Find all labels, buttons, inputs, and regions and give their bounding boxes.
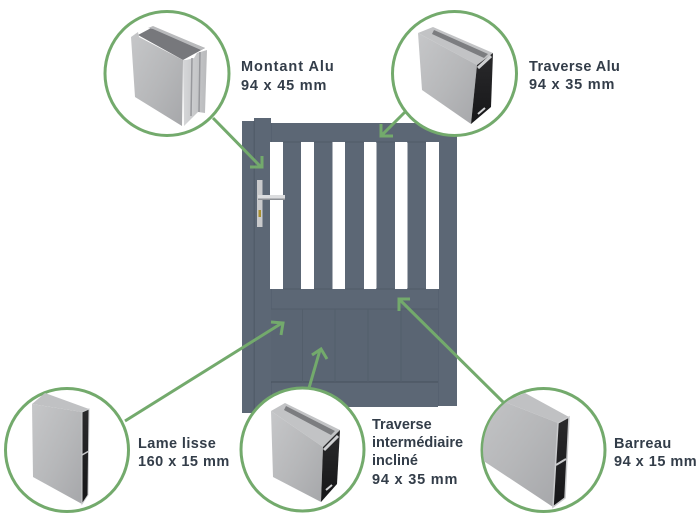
profile: montant — [131, 26, 207, 126]
arrow: Barreau — [399, 299, 503, 402]
arrow: Traverse intermediaire — [309, 349, 327, 388]
panel: Traverse Alu — [392, 12, 516, 136]
gate openings between bars — [270, 142, 439, 289]
label: Lame lisse: Lame lisse — [138, 436, 216, 452]
label: Traverse intermediaire: intermédiaire — [372, 435, 463, 451]
arrow: Lame lisse — [125, 322, 283, 421]
label: Traverse intermediaire: Traverse — [372, 417, 432, 433]
profile: barreau — [483, 393, 570, 508]
circle — [482, 388, 605, 512]
label: Traverse intermediaire: 94 x 35 mm — [372, 472, 458, 488]
profile: traverse inclinee — [271, 403, 340, 502]
label: Traverse Alu: 94 x 35 mm — [529, 77, 615, 93]
profile: traverse — [418, 27, 493, 124]
gate post shading — [254, 121, 255, 413]
circle — [6, 388, 128, 512]
label: Traverse Alu: Traverse Alu — [529, 59, 620, 75]
gate — [242, 118, 457, 413]
panel: Traverse intermediaire — [241, 388, 364, 511]
gate frame — [242, 118, 457, 413]
label: Traverse intermediaire: incliné — [372, 453, 418, 469]
panel: Lame lisse — [6, 388, 128, 512]
label: Montant Alu: 94 x 45 mm — [241, 78, 327, 94]
panel: Barreau — [470, 388, 605, 512]
circle — [392, 12, 516, 136]
panel: Montant Alu — [105, 12, 229, 136]
gate lower panel — [271, 309, 438, 382]
profile: lame — [32, 393, 89, 504]
label: Montant Alu: Montant Alu — [241, 59, 335, 75]
icon: door handle — [257, 180, 285, 227]
circle — [105, 12, 229, 136]
label: Lame lisse: 160 x 15 mm — [138, 454, 230, 470]
label: Barreau: 94 x 15 mm — [614, 454, 697, 470]
arrow: Montant Alu — [213, 118, 262, 167]
circle — [241, 388, 364, 511]
label: Barreau: Barreau — [614, 436, 672, 452]
arrow: Traverse Alu — [381, 112, 405, 136]
